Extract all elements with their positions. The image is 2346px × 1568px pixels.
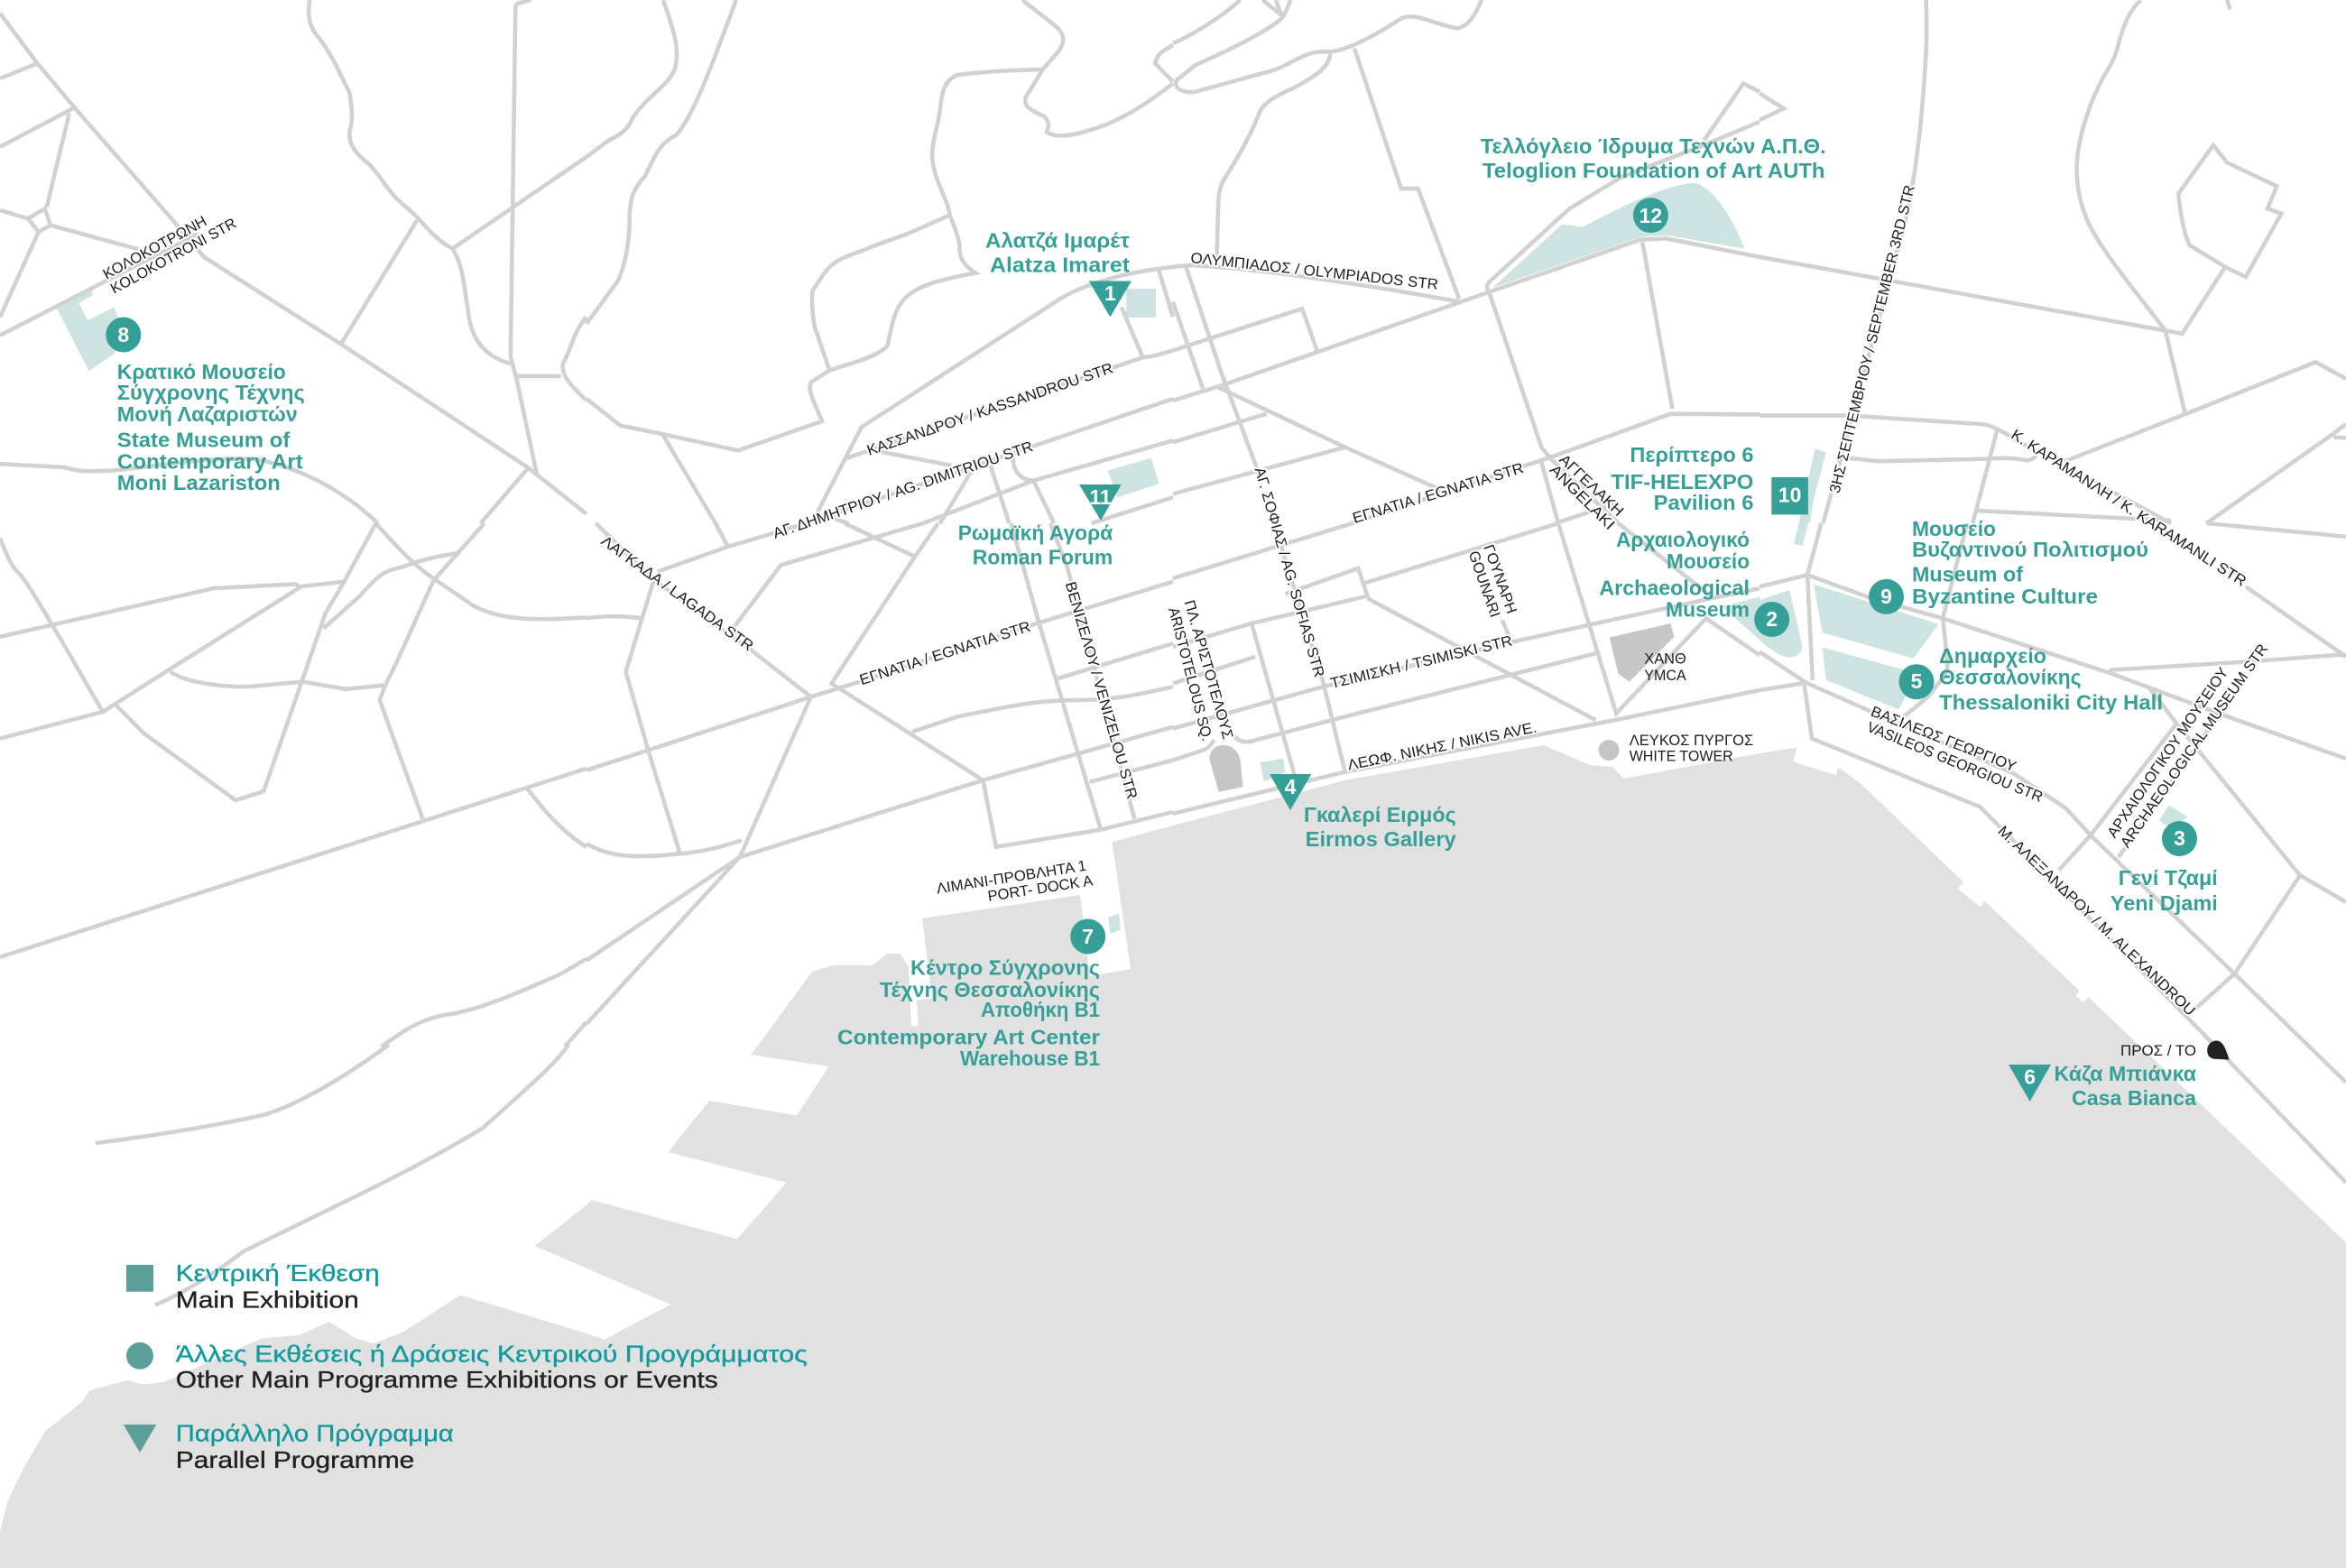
venue 4: Eirmos Gallery: 4 [1285, 775, 1297, 798]
legend: main exhibition: Κεντρική Έκθεση [176, 1259, 380, 1287]
venue 9: Museum of Byzantine Culture: 9 [1880, 585, 1892, 608]
venue 8: State Museum of Contemporary Art: Contemporary Art [117, 450, 303, 474]
roads: west [0, 523, 586, 1047]
venue 9: Museum of Byzantine Culture: Μουσείο [1912, 517, 1996, 540]
venue 12: Teloglion Foundation: Teloglion Foundation of Art AUTh [1482, 159, 1824, 182]
venue 2: Archaeological Museum: Archaeological [1599, 576, 1750, 599]
venue 2: Archaeological Museum: Μουσείο [1667, 549, 1750, 573]
label: Archaeological Museum street: ΑΡΧΑΙΟΛΟΓΙΚΟΥ ΜΟΥΣΕΙΟΥ [2104, 665, 2231, 841]
venue 11: Roman Forum: 11 [1089, 485, 1112, 509]
legend: other main programme: Άλλες Εκθέσεις ή Δράσεις Κεντρικού Προγράμματος [176, 1340, 808, 1367]
venue 7: Contemporary Art Center: 7 [1082, 925, 1094, 948]
legend: parallel programme: Parallel Programme [176, 1446, 414, 1473]
venue 2: Archaeological Museum: Αρχαιολογικό [1616, 528, 1750, 551]
White Tower dot [1599, 740, 1619, 761]
venue 2: Archaeological Museum: 2 [1766, 607, 1778, 631]
label: Lagada: ΛΑΓΚΑΔΑ / LAGADA STR [598, 533, 756, 654]
label: Archaeological Museum street: ARCHAEOLOGICAL MUSEUM STR [2118, 641, 2271, 851]
venue 4: Eirmos Gallery [1270, 774, 1456, 851]
venue 5: Thessaloniki City Hall: Θεσσαλονίκης [1939, 666, 2082, 689]
label: Aristotelous: ΠΛ. ΑΡΙΣΤΟΤΕΛΟΥΣ [1181, 598, 1236, 741]
legend: main exhibition: Main Exhibition [176, 1287, 359, 1314]
venue 1: Alatza Imaret: 1 [1104, 281, 1116, 305]
venue 9: Museum of Byzantine Culture: Byzantine Culture [1912, 585, 2098, 608]
roads: south-west [96, 1045, 568, 1305]
venue 7: Contemporary Art Center: Contemporary Art Center [837, 1026, 1100, 1049]
venue 11: Roman Forum [958, 484, 1122, 568]
YMCA block [1610, 623, 1674, 682]
venue 10: TIF-HELEXPO Pavilion 6 [1611, 443, 1808, 514]
icon: direction pin [2207, 1041, 2230, 1060]
venue 5: Thessaloniki City Hall: Δημαρχείο [1939, 644, 2046, 668]
label: Port dock: PORT- DOCK A [986, 872, 1094, 905]
venue 3: Yeni Djami: 3 [2174, 826, 2185, 850]
venue 8: State Museum of Contemporary Art: Μονή Λαζαριστών [117, 402, 298, 426]
venue 7: Contemporary Art Center: Warehouse B1 [960, 1047, 1100, 1070]
label: Angelaki: ΑΓΓΕΛΑΚΗ [1556, 451, 1627, 520]
label: Vasileos Georgiou: ΒΑΣΙΛΕΩΣ ΓΕΩΡΓΙΟΥ [1869, 704, 2018, 775]
label: Egnatia east: ΕΓΝΑΤΙΑ / EGNATIA STR [1351, 460, 1526, 527]
label: Vasileos Georgiou: VASILEOS GEORGIOU STR [1864, 719, 2045, 806]
venue 11: Roman Forum: Roman Forum [973, 545, 1113, 568]
venue 5: Thessaloniki City Hall: 5 [1911, 669, 1923, 693]
label: Kolokotroni: KOLOKOTRONI STR [108, 216, 239, 298]
label: Venizelou: ΒΕΝΙΖΕΛΟΥ / VENIZELOU STR [1062, 580, 1140, 801]
venue 8: State Museum of Contemporary Art: 8 [117, 323, 129, 346]
legend [124, 1259, 808, 1473]
venue 7: Contemporary Art Center: Τέχνης Θεσσαλονίκης [880, 978, 1100, 1001]
venue 7: Contemporary Art Center [837, 918, 1105, 1070]
legend: main exhibition [126, 1259, 380, 1314]
venue 3: Yeni Djami [2110, 821, 2218, 915]
label: Kassandrou: ΚΑΣΣΑΝΔΡΟΥ / KASSANDROU STR [864, 360, 1115, 459]
legend: other main programme [126, 1340, 808, 1393]
label: Ag. Dimitriou: ΑΓ. ΔΗΜΗΤΡΙΟΥ / AG. DIMITRIOU STR [771, 438, 1035, 542]
legend: parallel programme [124, 1419, 454, 1473]
label: Kolokotroni: ΚΟΛΟΚΟΤΡΩΝΗ [100, 213, 209, 283]
label: M. Alexandrou: Μ. ΑΛΕΞΑΝΔΡΟΥ / M. ALEXANDROU [1994, 823, 2198, 1019]
label: White Tower: ΛΕΥΚΟΣ ΠΥΡΓΟΣ [1630, 733, 1753, 749]
venue 1: Alatza Imaret [985, 229, 1131, 317]
roads: east [1760, 523, 2346, 1047]
label: White Tower [1630, 733, 1753, 764]
venue 8: State Museum of Contemporary Art: State Museum of [117, 429, 291, 452]
venue 10: TIF-HELEXPO Pavilion 6: TIF-HELEXPO [1611, 470, 1753, 493]
venue 6: Casa Bianca: 6 [2024, 1065, 2036, 1089]
venue 6: Casa Bianca: Κάζα Μπιάνκα [2054, 1062, 2196, 1085]
venue 10: TIF-HELEXPO Pavilion 6: Pavilion 6 [1654, 491, 1753, 514]
venue 8: State Museum of Contemporary Art: Σύγχρονης Τέχνης [117, 381, 305, 404]
landmarks (grey) [1209, 623, 1674, 792]
venue 9: Museum of Byzantine Culture: Βυζαντινού Πολιτισμού [1912, 538, 2148, 561]
label: Angelaki: ANGELAKI [1547, 462, 1618, 533]
legend: parallel programme: Παράλληλο Πρόγραμμα [176, 1419, 454, 1446]
venue 3: Yeni Djami: Γενί Τζαμί [2119, 866, 2218, 890]
venue 10: TIF-HELEXPO Pavilion 6: Περίπτερο 6 [1630, 443, 1753, 466]
venue 5: Thessaloniki City Hall [1898, 644, 2163, 714]
label: Angelaki [1547, 451, 1627, 533]
venue 7: Contemporary Art Center: Αποθήκη Β1 [981, 998, 1100, 1021]
label: Nikis: ΛΕΩΦ. ΝΙΚΗΣ / NIKIS AVE. [1346, 719, 1538, 774]
label: White Tower: WHITE TOWER [1630, 748, 1733, 764]
venue 10: TIF-HELEXPO Pavilion 6: 10 [1778, 484, 1801, 507]
label: Olympiados: ΟΛΥΜΠΙΑΔΟΣ / OLYMPIADOS STR [1190, 250, 1439, 293]
roads: centre-left [586, 523, 1173, 1024]
venue 11: Roman Forum: Ρωμαϊκή Αγορά [958, 521, 1113, 545]
venue 12: Teloglion Foundation: 12 [1639, 204, 1662, 227]
venue 4: Eirmos Gallery: Eirmos Gallery [1306, 827, 1456, 851]
venue 1: Alatza Imaret: Αλατζά Ιμαρέτ [985, 229, 1130, 253]
venue 2: Archaeological Museum: Museum [1666, 598, 1750, 622]
label: Gounari [1465, 542, 1519, 620]
venue 8: State Museum of Contemporary Art [106, 318, 305, 494]
label: YMCA: YMCA [1644, 668, 1686, 684]
label: Egnatia west: ΕΓΝΑΤΙΑ / EGNATIA STR [857, 619, 1033, 688]
street labels [100, 183, 2271, 1059]
venue 6: Casa Bianca [2009, 1062, 2196, 1110]
sea [0, 745, 2346, 1568]
label: towards: ΠΡΟΣ / ΤΟ [2120, 1043, 2196, 1059]
venue 7: Contemporary Art Center: Κέντρο Σύγχρονης [910, 956, 1100, 980]
venue 12: Teloglion Foundation: Τελλόγλειο Ίδρυμα Τεχνών Α.Π.Θ. [1481, 134, 1826, 158]
label: Gounari: GOUNARI [1465, 549, 1503, 620]
venue 1: Alatza Imaret: Alatza Imaret [990, 253, 1130, 276]
roads: north-centre-right [1173, 0, 1760, 523]
venue 8: State Museum of Contemporary Art: Moni Lazariston [117, 471, 281, 494]
venue 8: State Museum of Contemporary Art: Κρατικό Μουσείο [117, 360, 286, 383]
label: YMCA: ΧΑΝΘ [1644, 650, 1686, 667]
venue 2: Archaeological Museum [1599, 528, 1789, 637]
venue 9: Museum of Byzantine Culture: Museum of [1912, 563, 2023, 586]
legend: other main programme: Other Main Programme Exhibitions or Events [176, 1366, 718, 1393]
label: Tsimiski: ΤΣΙΜΙΣΚΗ / TSIMISKI STR [1329, 632, 1514, 692]
venue 12: Teloglion Foundation [1481, 134, 1826, 233]
roads: north-west [0, 0, 586, 523]
label: Gounari: ΓΟΥΝΑΡΗ [1480, 542, 1519, 616]
venue 4: Eirmos Gallery: Γκαλερί Ειρμός [1304, 803, 1456, 826]
label: Karamanli: Κ. ΚΑΡΑΜΑΝΛΗ / K. KARAMANLI STR [2009, 427, 2249, 590]
label: Aristotelous: ARISTOTELOUS SQ. [1165, 605, 1215, 742]
venue 6: Casa Bianca: Casa Bianca [2072, 1086, 2196, 1110]
Aristotelous square [1209, 745, 1243, 792]
venue 3: Yeni Djami: Yeni Djami [2110, 891, 2218, 915]
venue 9: Museum of Byzantine Culture [1869, 517, 2148, 614]
label: YMCA [1644, 650, 1686, 684]
roads: centre-right [1173, 523, 1760, 814]
roads: north-east [1760, 0, 2346, 523]
label: Ag. Sofias: ΑΓ. ΣΟΦΙΑΣ / AG. SOFIAS STR [1252, 466, 1327, 679]
venue 5: Thessaloniki City Hall: Thessaloniki City Hall [1939, 690, 2163, 714]
label: Port dock: ΛΙΜΑΝΙ-ΠΡΟΒΛΗΤΑ 1 [936, 858, 1087, 898]
roads: south-east [2204, 973, 2346, 1183]
label: 3rd September: 3ΗΣ ΣΕΠΤΕΜΒΡΙΟΥ / SEPTEMBER 3RD STR [1827, 183, 1918, 494]
roads: north-centre-left [586, 0, 1173, 523]
venue footprints (light teal) [57, 183, 2188, 934]
